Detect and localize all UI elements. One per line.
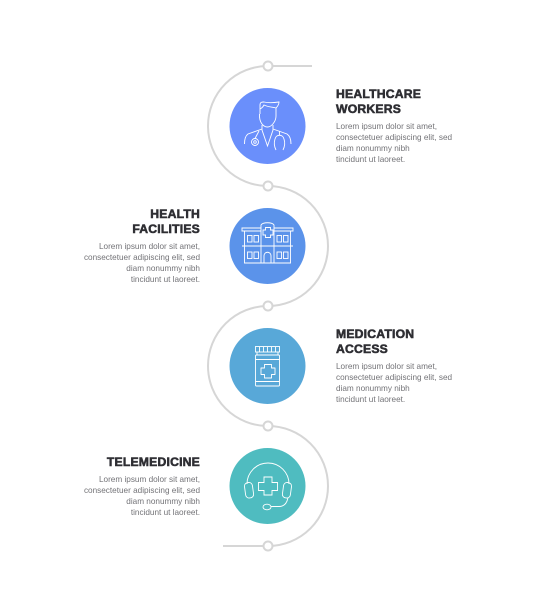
heading: healthcare workers: WORKERS — [336, 102, 401, 116]
icon: medical headset — [230, 448, 306, 524]
text block: telemedicine — [84, 455, 200, 517]
icon: doctor — [230, 88, 306, 164]
heading: medication access: ACCESS — [336, 342, 388, 356]
timeline nodes — [264, 62, 272, 550]
heading: health facilities: HEALTH — [150, 207, 200, 221]
heading: medication access — [336, 327, 414, 356]
body text: Lorem ipsum dolor sit amet, — [336, 362, 437, 371]
heading: medication access: MEDICATION — [336, 327, 414, 341]
body text: tincidunt ut laoreet. — [131, 508, 200, 517]
body text: diam nonummy nibh — [336, 384, 410, 393]
heading: healthcare workers — [336, 87, 421, 116]
body text: consectetuer adipiscing elit, sed — [336, 133, 452, 142]
icon: medicine bottle — [230, 328, 306, 404]
body text: consectetuer adipiscing elit, sed — [84, 253, 200, 262]
icon: hospital building — [230, 208, 306, 284]
body text: diam nonummy nibh — [336, 144, 410, 153]
serpentine timeline path — [208, 66, 328, 546]
heading: health facilities: FACILITIES — [132, 222, 200, 236]
body text: Lorem ipsum dolor sit amet, — [99, 475, 200, 484]
body text: tincidunt ut laoreet. — [131, 275, 200, 284]
body text: Lorem ipsum dolor sit amet, — [99, 242, 200, 251]
body text: consectetuer adipiscing elit, sed — [84, 486, 200, 495]
body text — [84, 242, 200, 284]
heading: telemedicine: TELEMEDICINE — [107, 455, 200, 469]
text block: health facilities — [84, 207, 200, 284]
body text — [336, 122, 452, 164]
body text: diam nonummy nibh — [126, 264, 200, 273]
text block: healthcare workers — [336, 87, 452, 164]
body text: consectetuer adipiscing elit, sed — [336, 373, 452, 382]
body text: tincidunt ut laoreet. — [336, 395, 405, 404]
heading: healthcare workers: HEALTHCARE — [336, 87, 421, 101]
text block: medication access — [336, 327, 452, 404]
heading: health facilities — [132, 207, 200, 236]
body text: diam nonummy nibh — [126, 497, 200, 506]
body text: tincidunt ut laoreet. — [336, 155, 405, 164]
body text: Lorem ipsum dolor sit amet, — [336, 122, 437, 131]
body text — [84, 475, 200, 517]
body text — [336, 362, 452, 404]
